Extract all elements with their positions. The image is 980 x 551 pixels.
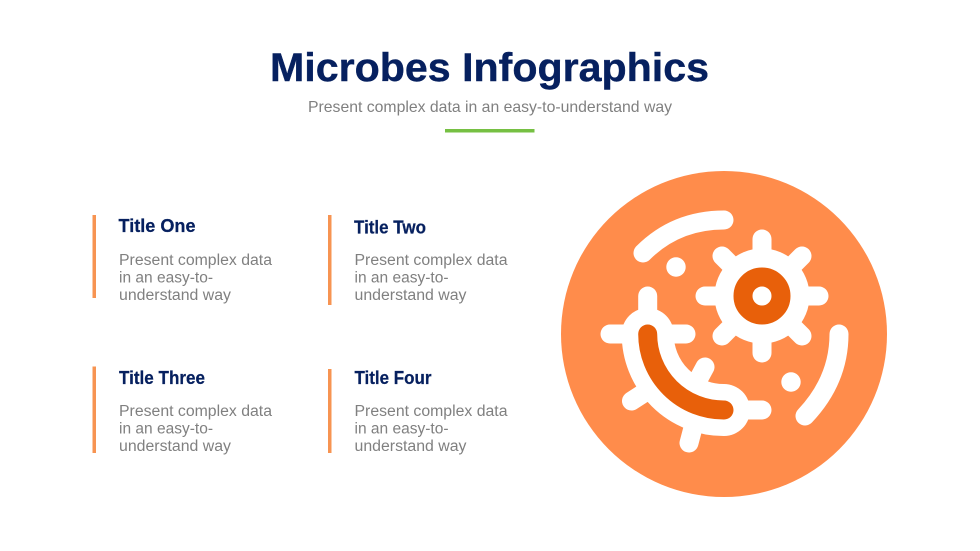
text block: title two body: Present complex data (354, 252, 508, 269)
icon background circle (561, 171, 887, 497)
accent bar one (92, 215, 96, 298)
text block: title one body: in an easy-to- (119, 270, 213, 286)
icon: top arc (643, 220, 724, 253)
title: Microbes Infographics (270, 46, 709, 90)
panel: title two (328, 215, 508, 305)
icon: dot upper (666, 257, 686, 277)
icon: microbes (561, 171, 887, 497)
accent bar four (328, 369, 332, 453)
icon: right arc (805, 334, 839, 416)
subtitle: Present complex data in an easy-to-understand way (308, 99, 672, 116)
text block: title one body: understand way (119, 287, 231, 304)
text block: title three body: in an easy-to- (119, 420, 213, 438)
accent bar two (328, 215, 332, 305)
text block: title two body: understand way (354, 287, 467, 304)
rod microbe body (648, 334, 724, 410)
heading: title three: Title Three (119, 368, 205, 388)
icon: round microbe (705, 239, 819, 353)
heading: title two: Title Two (354, 218, 426, 238)
text block: title one body: Present complex data (119, 252, 272, 269)
round microbe body (714, 248, 810, 344)
text block: title four body: in an easy-to- (354, 420, 448, 438)
accent bar three (92, 366, 96, 453)
text block: title three body: Present complex data (119, 403, 272, 420)
round microbe spikes (705, 239, 819, 353)
icon: dot lower (781, 372, 801, 392)
round microbe nucleus (743, 277, 781, 315)
text block: title three body: understand way (119, 438, 231, 455)
green accent bar (445, 129, 534, 132)
panel: title four (328, 368, 508, 455)
rod microbe spikes (610, 296, 762, 443)
text block: title four body: Present complex data (354, 403, 508, 420)
panel: title one (92, 215, 272, 304)
panel: title three (92, 366, 272, 455)
heading: title one: Title One (118, 216, 196, 236)
heading: title four: Title Four (354, 368, 432, 388)
icon: rod microbe (610, 296, 762, 443)
text block: title two body: in an easy-to- (354, 270, 448, 286)
text block: title four body: understand way (354, 438, 467, 455)
rod microbe core (648, 334, 724, 410)
